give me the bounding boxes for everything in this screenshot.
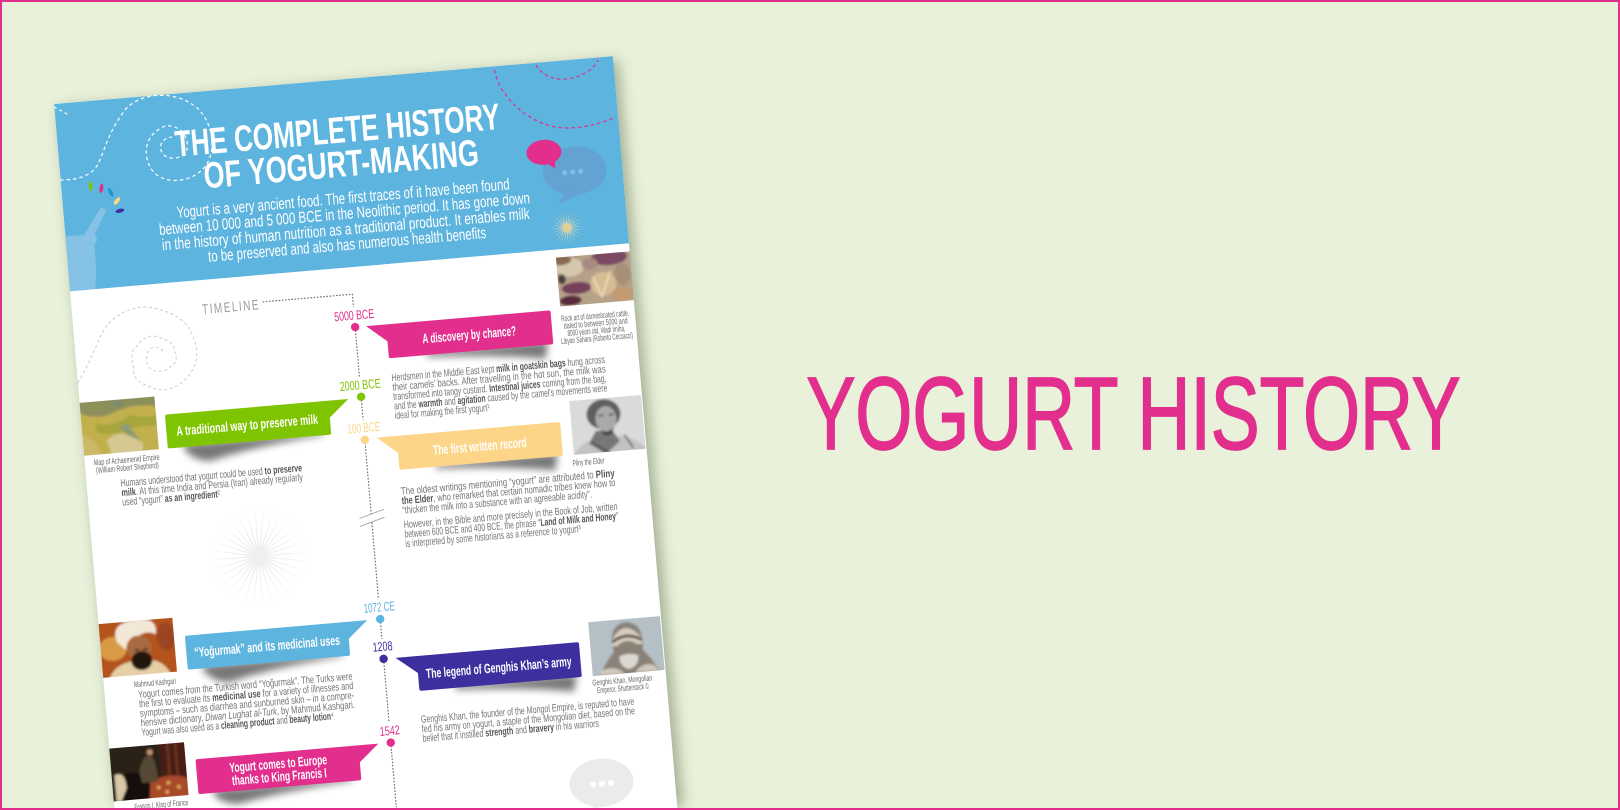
icon: blue speech bubble bbox=[542, 146, 606, 204]
text block bbox=[138, 671, 357, 739]
icon: jar and spoon bbox=[65, 208, 106, 292]
ribbon: the first written record bbox=[377, 422, 563, 472]
image: Francis I on horseback bbox=[109, 742, 188, 802]
timeline dot bbox=[351, 323, 360, 332]
date label: 1072 CE bbox=[363, 598, 395, 616]
ribbon shadow bbox=[184, 432, 325, 463]
text block: The oldest writings mentioning “yogurt” are attributed to Pliny bbox=[400, 467, 615, 498]
text block: Genghis Khan, the founder of the Mongol Empire, is reputed to have bbox=[420, 696, 635, 726]
ribbon shadow bbox=[213, 778, 354, 806]
text block: and the warmth and agitation caused by the camel’s movements were bbox=[394, 382, 608, 413]
image caption: Emperor, Shutterstock © bbox=[597, 681, 650, 695]
image caption: (William Robert Shepherd) bbox=[96, 460, 159, 475]
header band bbox=[49, 56, 629, 292]
intro text: between 10 000 and 5 000 BCE in the Neolithic period. It has gone down bbox=[158, 190, 531, 239]
text block: Yogurt was also used as a cleaning product and beauty lotion⁴ bbox=[141, 710, 334, 739]
ribbon: yogurt comes to Europe: thanks to King Francis I bbox=[231, 765, 327, 788]
image caption: 8000 years old, Wadi Imiha, bbox=[567, 323, 626, 338]
image caption: Genghis Khan, Mongolian bbox=[592, 673, 653, 688]
date label: 2000 BCE bbox=[339, 376, 381, 394]
ribbon shadow bbox=[427, 342, 550, 369]
ribbon: yogurmak and its medicinal uses: “Yoğurmak” and its medicinal uses bbox=[194, 633, 340, 660]
icon: small sun bbox=[550, 212, 584, 244]
date label: 1542 bbox=[379, 722, 400, 739]
icon: pink speech bubble bbox=[526, 140, 562, 168]
intro text: Yogurt is a very ancient food. The first traces of it have been found bbox=[176, 176, 510, 222]
text block: Herdsmen in the Middle East kept milk in goatskin bags hung across bbox=[391, 354, 605, 384]
image: Genghis Khan statue bbox=[588, 616, 664, 676]
image caption: Mahmud Kashgari bbox=[133, 676, 176, 689]
title: THE COMPLETE HISTORY bbox=[173, 96, 502, 165]
timeline label: TIMELINE bbox=[201, 297, 261, 318]
timeline break mark bbox=[359, 509, 385, 526]
ribbon: a discovery by chance? bbox=[366, 310, 553, 360]
event: 5000 BCE bbox=[334, 251, 634, 419]
text block bbox=[420, 696, 636, 745]
event: 1542 bbox=[107, 722, 405, 810]
intro text: in the history of human nutrition as a traditional product. It enables milk bbox=[161, 206, 531, 254]
intro text: to be preserved and also has numerous health benefits bbox=[207, 225, 487, 266]
date label: 5000 BCE bbox=[334, 306, 375, 324]
ribbon: yogurt comes to Europe: Yogurt comes to Europe bbox=[229, 752, 328, 775]
text block: hensive dictionary, Diwan Lughat al-Turk, by Mahmud Kashgari. bbox=[140, 699, 355, 729]
text block: “thicken the milk into a substance with an agreeable acidity”. bbox=[402, 489, 592, 517]
event: 1072 CE bbox=[96, 597, 404, 742]
title bbox=[174, 104, 498, 188]
decoration: pink dashed arcs bbox=[495, 60, 616, 128]
image caption bbox=[592, 673, 653, 696]
image caption: dated to between 5000 and bbox=[563, 315, 628, 331]
text block: transformed into tangy custard. Intestinal juices coming from the bag, bbox=[393, 373, 607, 403]
image caption: Rock art of domesticated cattle, bbox=[561, 308, 629, 323]
text block: Yogurt comes from the Turkish word “Yoğurmak”. The Turks were bbox=[138, 671, 353, 701]
text block: fed his army on yogurt, a staple of the Mongolian diet, based on the bbox=[421, 705, 636, 735]
decoration: grey dashed spiral bbox=[78, 307, 197, 390]
title: OF YOGURT-MAKING bbox=[202, 132, 480, 196]
text block: belief that it instilled strength and bravery in his warriors bbox=[422, 718, 599, 745]
image caption: Libyan Sahara (Roberto Ceccacci) bbox=[561, 330, 633, 346]
icon: coloured drops bbox=[88, 181, 124, 213]
ribbon shadow bbox=[455, 674, 578, 702]
date label: 1208 bbox=[372, 638, 393, 655]
text block: is interpreted by some historians as a reference to yogurt³ bbox=[405, 523, 582, 550]
date label: 100 BCE bbox=[347, 419, 381, 437]
text block bbox=[400, 467, 620, 550]
image caption: Map of Achaemenid Empire bbox=[93, 452, 160, 467]
ribbon shadow bbox=[202, 653, 344, 684]
image caption bbox=[93, 452, 161, 475]
image caption bbox=[559, 307, 633, 346]
timeline dot bbox=[379, 654, 388, 663]
decoration: small dashed corner bbox=[54, 107, 69, 115]
event: 100 BCE bbox=[346, 393, 654, 554]
text block: However, in the Bible and more precisely in the Book of Job, written bbox=[403, 501, 618, 531]
ribbon: yogurmak and its medicinal uses bbox=[185, 620, 370, 670]
text block: their camels’ backs. After travelling in the hot sun, the milk was bbox=[392, 363, 606, 394]
icon: grey speech bubble bbox=[568, 756, 635, 810]
ribbon: a discovery by chance?: A discovery by chance? bbox=[422, 323, 517, 346]
text block: used “yogurt” as an ingredient² bbox=[122, 488, 221, 509]
timeline dot bbox=[357, 392, 366, 401]
text block: milk. At this time India and Persia (Iran) already regularly bbox=[121, 472, 304, 499]
text block: symptoms – such as diarrhea and sunburned skin – in a compre- bbox=[139, 690, 355, 720]
image: Mahmud Kashgari bbox=[98, 618, 177, 678]
text block bbox=[391, 354, 609, 422]
timeline dotted line bbox=[263, 294, 396, 810]
timeline dot bbox=[386, 738, 395, 747]
text block: Humans understood that yogurt could be used to preserve bbox=[120, 462, 303, 490]
image: map of Achaemenid Empire bbox=[80, 396, 159, 456]
timeline dot bbox=[376, 614, 385, 624]
poster sheet bbox=[54, 56, 677, 808]
text block: between 600 BCE and 400 BCE, the phrase “Land of Milk and Honey” bbox=[404, 510, 619, 541]
intro text bbox=[159, 178, 530, 263]
icon: grey sunburst bbox=[205, 502, 313, 610]
ribbon: yogurt comes to Europe bbox=[195, 744, 381, 794]
image: rock art bbox=[556, 251, 634, 306]
ribbon: a traditional way to preserve milk bbox=[165, 399, 351, 449]
text block bbox=[120, 462, 305, 509]
poster shadow bbox=[59, 60, 683, 808]
ribbon: the first written record: The first written record bbox=[432, 435, 527, 458]
event: 1208 bbox=[372, 614, 671, 748]
ribbon: a traditional way to preserve milk: A traditional way to preserve milk bbox=[176, 412, 319, 439]
ribbon shadow bbox=[436, 453, 559, 481]
ribbon: the legend of Genghis Khan's army bbox=[396, 642, 582, 693]
event: 2000 BCE bbox=[77, 375, 390, 512]
image caption: Pliny the Elder bbox=[572, 455, 605, 468]
decoration: white dashed spiral bbox=[60, 95, 212, 180]
ribbon: the legend of Genghis Khan's army: The legend of Genghis Khan’s army bbox=[425, 654, 572, 681]
poster: the complete history of yogurt-making bbox=[49, 56, 679, 810]
timeline dot bbox=[360, 435, 369, 444]
text block: the Elder, who remarked that certain nomadic tribes knew how to bbox=[401, 477, 616, 507]
text block: ideal for making the first yogurt¹ bbox=[394, 402, 490, 422]
image: Pliny the Elder bbox=[569, 395, 646, 455]
text block: the first to evaluate its medicinal use for a variety of illnesses and bbox=[139, 680, 354, 710]
